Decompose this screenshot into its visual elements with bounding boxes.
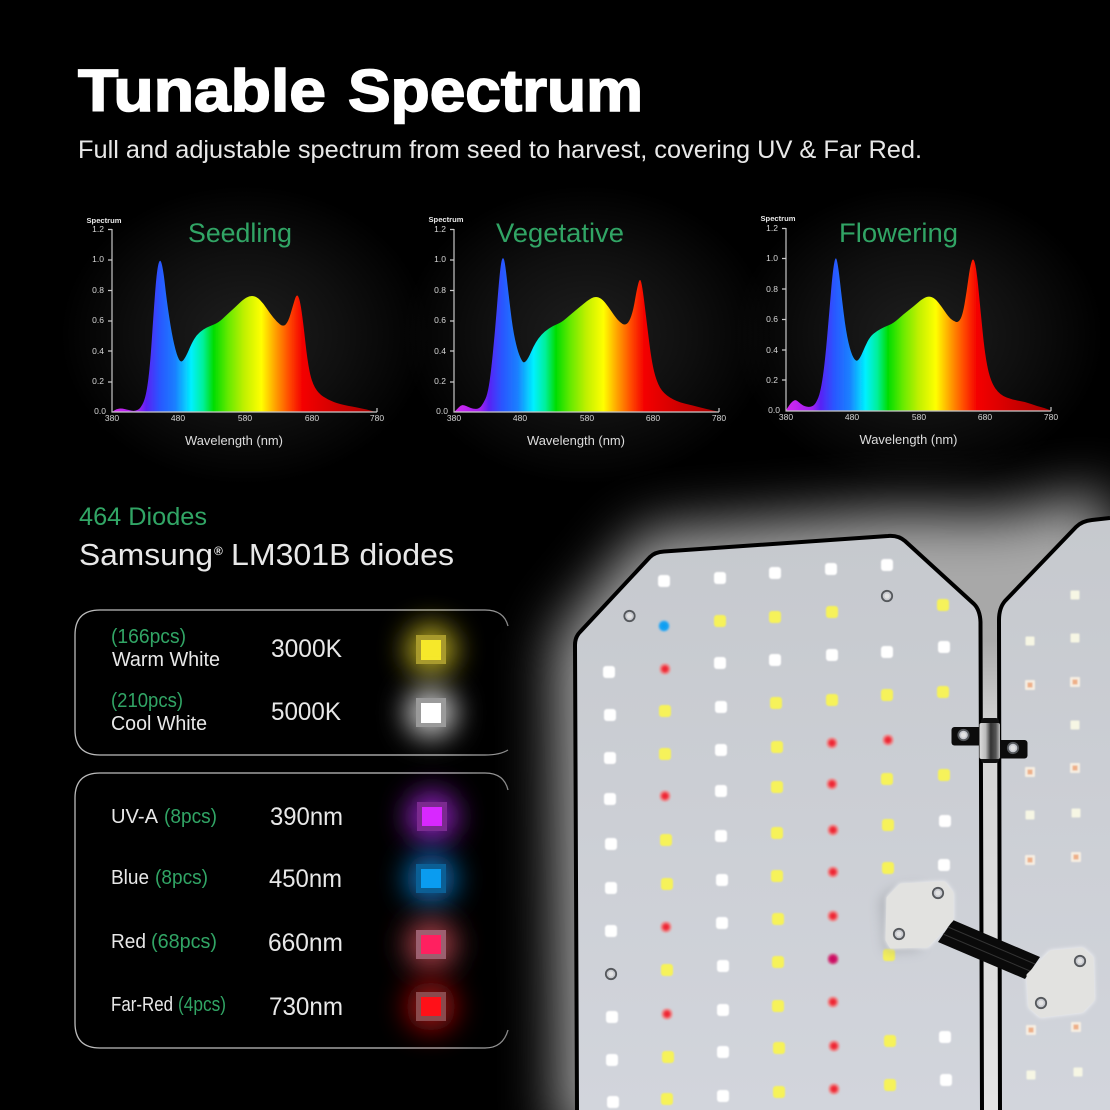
- Red row: Red: [111, 931, 146, 953]
- y tick labels: 0.0: [436, 406, 448, 416]
- panel screws: [606, 591, 892, 979]
- x tick labels: 480: [171, 413, 185, 423]
- Red row: [111, 929, 343, 957]
- x tick labels: [105, 413, 384, 423]
- gap strip between panels: [980, 600, 1000, 1110]
- diode model heading: LM301B diodes: [231, 537, 454, 572]
- right panel: [999, 518, 1110, 1110]
- diode model heading: ®: [214, 544, 223, 558]
- mount shadow: [880, 885, 920, 952]
- y tick labels: 0.8: [434, 285, 446, 295]
- axes: [450, 229, 719, 412]
- y tick labels: 0.0: [94, 406, 106, 416]
- cool white row: 5000K: [271, 698, 341, 726]
- hinge: [952, 718, 1028, 763]
- axes: [108, 229, 377, 412]
- chart background glows: [60, 185, 1104, 485]
- LEDs on left panel: [603, 559, 952, 1108]
- cool white row: (210pcs): [111, 690, 183, 712]
- heading: Vegetative: Vegetative: [496, 218, 624, 248]
- x axis title: Wavelength (nm): [185, 434, 283, 448]
- Blue row: [111, 865, 342, 893]
- chart: Vegetative: [428, 215, 726, 448]
- Red row: 660nm: [268, 929, 343, 957]
- axes: [782, 228, 1051, 411]
- x axis title: Wavelength (nm): [860, 433, 958, 447]
- icon: Far-Red swatch: [406, 982, 456, 1032]
- left mount: [887, 883, 952, 947]
- y tick labels: [434, 224, 448, 416]
- x axis title: Wavelength (nm): [527, 434, 625, 448]
- title: [78, 58, 643, 124]
- Far-Red row: [111, 993, 343, 1021]
- x tick labels: 580: [580, 413, 594, 423]
- x tick labels: 580: [912, 412, 926, 422]
- chart: Flowering: Spectrum: [760, 214, 796, 223]
- x tick labels: 580: [238, 413, 252, 423]
- y tick labels: 0.2: [434, 376, 446, 386]
- Far-Red row: Far-Red: [111, 994, 173, 1016]
- y tick labels: 1.2: [92, 224, 104, 234]
- UV-A row: 390nm: [270, 803, 343, 831]
- icon: Blue swatch: [406, 854, 456, 904]
- x tick labels: 480: [845, 412, 859, 422]
- wiring connector: [880, 882, 1094, 1017]
- spectrum curve: [454, 258, 718, 412]
- cool white row: [111, 690, 341, 735]
- warm white row: 3000K: [271, 635, 342, 663]
- icon: Red swatch: [406, 920, 456, 970]
- chart: Seedling: Spectrum: [86, 216, 122, 225]
- y tick labels: 1.2: [766, 223, 778, 233]
- subtitle: Full and adjustable spectrum from seed to harvest, covering UV & Far Red.: [78, 136, 922, 164]
- heading: Seedling: Seedling: [188, 218, 292, 248]
- chart: Flowering: [760, 214, 1058, 447]
- UV-A row: UV-A: [111, 806, 159, 828]
- cable: [938, 920, 1040, 979]
- light panel product photo: [556, 495, 1110, 1110]
- Blue row: 450nm: [269, 865, 342, 893]
- icon: warm white swatch: [406, 624, 456, 674]
- left panel: [575, 536, 982, 1110]
- panel glow: [556, 495, 1110, 1110]
- y tick labels: 1.0: [92, 254, 104, 264]
- Far-Red row: (4pcs): [178, 994, 226, 1016]
- icon: UV-A swatch: [407, 792, 457, 842]
- Far-Red row: 730nm: [269, 993, 343, 1021]
- x tick labels: 480: [513, 413, 527, 423]
- cool white row: Cool White: [111, 713, 207, 735]
- y tick labels: 0.2: [92, 376, 104, 386]
- y tick labels: [766, 223, 780, 415]
- panel: narrow-band diodes: [75, 773, 508, 1048]
- spectrum curve: [786, 258, 1052, 411]
- y tick labels: 0.8: [92, 285, 104, 295]
- x tick labels: 780: [712, 413, 726, 423]
- y tick labels: 0.6: [92, 315, 104, 325]
- x tick labels: 380: [779, 412, 793, 422]
- warm white row: Warm White: [112, 649, 220, 671]
- x tick labels: 380: [447, 413, 461, 423]
- y tick labels: 1.0: [434, 254, 446, 264]
- x tick labels: 680: [978, 412, 992, 422]
- card outline: [75, 773, 508, 1048]
- y tick labels: 0.4: [434, 346, 446, 356]
- y tick labels: 0.8: [766, 284, 778, 294]
- Blue row: (8pcs): [155, 867, 208, 889]
- y tick labels: 0.6: [766, 314, 778, 324]
- icon: cool white swatch: [406, 688, 456, 738]
- y tick labels: [92, 224, 106, 416]
- LEDs on right panel: [1025, 590, 1082, 1080]
- UV-A row: [111, 803, 343, 831]
- y tick labels: 1.0: [766, 253, 778, 263]
- y tick labels: 0.6: [434, 315, 446, 325]
- x tick labels: [447, 413, 726, 423]
- title: Tunable: [78, 58, 326, 124]
- spectrum curve: [112, 261, 377, 412]
- warm white row: [111, 626, 342, 671]
- warm white row: (166pcs): [111, 626, 186, 648]
- x tick labels: 780: [370, 413, 384, 423]
- y tick labels: 0.4: [92, 346, 104, 356]
- title: Spectrum: [348, 58, 643, 124]
- Red row: (68pcs): [151, 931, 217, 953]
- chart: Vegetative: Spectrum: [428, 215, 464, 224]
- x tick labels: 680: [305, 413, 319, 423]
- mount glow: [886, 882, 1094, 1017]
- diode count heading: 464 Diodes: [79, 503, 207, 531]
- Blue row: Blue: [111, 867, 149, 889]
- card outline: [75, 610, 508, 755]
- right mount: [1028, 949, 1093, 1016]
- x tick labels: [779, 412, 1058, 422]
- diode model heading: Samsung: [79, 537, 213, 572]
- y tick labels: 0.4: [766, 345, 778, 355]
- UV-A row: (8pcs): [164, 806, 217, 828]
- x tick labels: 680: [646, 413, 660, 423]
- x tick labels: 380: [105, 413, 119, 423]
- x tick labels: 780: [1044, 412, 1058, 422]
- chart: Seedling: [86, 216, 384, 448]
- heading: Flowering: Flowering: [839, 218, 958, 248]
- panel: white diodes: [75, 610, 508, 755]
- diode model heading: [79, 537, 454, 572]
- y tick labels: 0.2: [766, 375, 778, 385]
- y tick labels: 1.2: [434, 224, 446, 234]
- y tick labels: 0.0: [768, 405, 780, 415]
